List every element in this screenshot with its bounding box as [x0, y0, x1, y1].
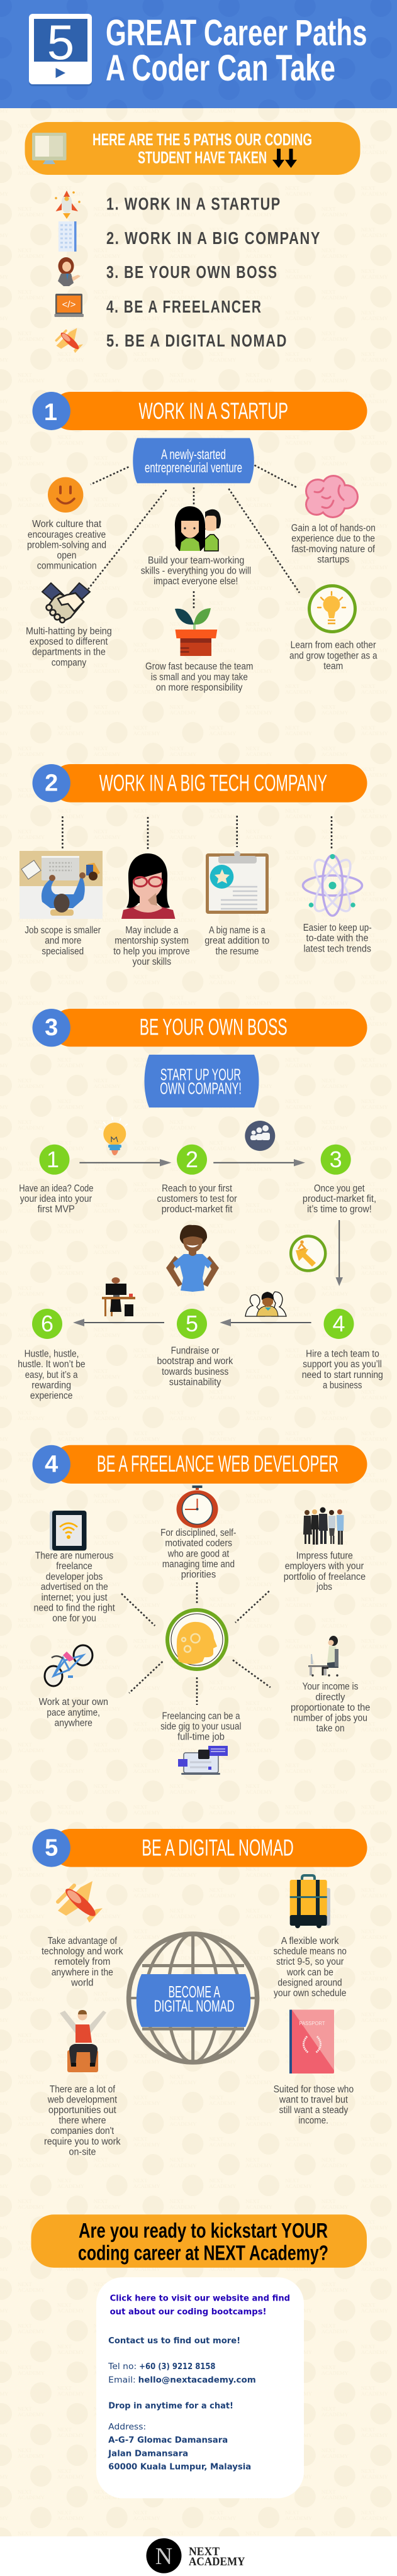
text: disciplined coders: priorities — [181, 1569, 216, 1580]
icon: desk worker — [102, 1277, 135, 1316]
text: multi-hatting: Multi-hatting by being — [26, 626, 112, 637]
panel: work in a big tech company — [20, 764, 372, 967]
text: impress employers: jobs — [316, 1582, 332, 1592]
icon: smiley — [48, 477, 83, 513]
text: disciplined coders: managing time and — [162, 1559, 235, 1570]
text: travel income: want to travel but — [279, 2094, 349, 2105]
address: Address: — [108, 2423, 146, 2432]
text: step 5 — [157, 1346, 233, 1387]
logo: next academy — [146, 2538, 245, 2573]
icon: plane — [58, 1881, 103, 1923]
panel: work in a startup — [26, 392, 377, 693]
website link: out about our coding bootcamps! — [110, 2307, 267, 2317]
illustration: woman with glasses — [121, 853, 175, 919]
heading: section 1: 1 — [44, 399, 57, 426]
step 1 — [39, 1145, 69, 1175]
icon: head with gears — [167, 1610, 226, 1669]
icon: globe with label: DIGITAL NOMAD — [154, 1996, 235, 2015]
intro text — [92, 130, 312, 167]
text: web development opportunities: web development — [47, 2094, 118, 2105]
callout: start up your own company: OWN COMPANY! — [160, 1079, 242, 1098]
dotted connectors — [62, 816, 332, 850]
text: learn together: Learn from each other — [291, 640, 376, 650]
text: remote work: technology and work — [42, 1946, 123, 1957]
text: travel income: still want a steady — [279, 2105, 349, 2116]
text: own pace: pace anytime, — [47, 1707, 100, 1718]
intro banner — [25, 122, 360, 175]
text: step 3: it’s time to grow! — [307, 1204, 372, 1215]
icon: laptop with code: </> — [62, 299, 76, 310]
icon: team outlines — [245, 1292, 286, 1316]
panel: be your own boss — [18, 1009, 383, 1401]
contact text: Tel no: — [108, 2362, 137, 2372]
heading: section 2 — [32, 764, 367, 802]
list text — [106, 194, 321, 350]
callout: newly-started venture: entrepreneurial venture — [145, 460, 242, 475]
text: step 1 — [19, 1183, 94, 1215]
text: keep up to date: to-date with the — [306, 933, 369, 944]
heading: section 4: 4 — [45, 1452, 58, 1478]
icon: video screen with number 5 — [29, 14, 92, 86]
contact text: Contact us to find out more! — [108, 2336, 240, 2346]
text: remote work — [42, 1936, 123, 1988]
text: job scope: specialised — [42, 946, 84, 957]
text: keep up to date: Easier to keep up- — [303, 923, 372, 933]
text: big name — [204, 925, 269, 957]
website link — [110, 2294, 290, 2317]
text: web development opportunities — [44, 2084, 121, 2157]
text: remote work: world — [70, 1977, 93, 1988]
text: side gig — [160, 1711, 242, 1743]
text: numerous freelance jobs: advertised on the — [41, 1582, 108, 1592]
icon: monitor — [32, 133, 67, 164]
text: impress employers: Impress future — [296, 1551, 353, 1561]
text: step 4: need to start running — [302, 1370, 383, 1380]
panel: be a digital nomad — [32, 1829, 367, 2157]
text: step 1: your idea into your — [20, 1194, 92, 1204]
text: step 3 — [303, 1183, 376, 1215]
text: multi-hatting: departments in the — [32, 647, 106, 658]
text: hands-on experience — [291, 523, 376, 565]
text: team-working skills — [141, 555, 251, 587]
text: step 2: product-market fit — [162, 1204, 233, 1215]
text: step 5: sustainability — [169, 1377, 221, 1387]
icon: woman at desk — [308, 1636, 338, 1677]
text: income: directly — [315, 1692, 345, 1703]
text: step 6: rewarding — [31, 1380, 71, 1391]
text: impress employers — [284, 1551, 366, 1592]
text: income: Your income is — [302, 1682, 359, 1692]
icon: laptop with chat bubbles — [178, 1746, 228, 1775]
text: step 4 — [302, 1349, 383, 1391]
text: work culture — [27, 519, 106, 572]
icon: tablet wifi — [50, 1511, 87, 1551]
list text: 3. BE YOUR OWN BOSS — [106, 262, 278, 282]
text: web development opportunities: on-site — [69, 2146, 96, 2157]
text: income — [291, 1682, 370, 1734]
text: own pace: Work at your own — [39, 1697, 108, 1707]
text: travel income: Suited for those who — [274, 2084, 354, 2095]
illustration: confident woman — [166, 1225, 219, 1292]
illustration: clipboard resume — [206, 851, 269, 914]
icon: brain — [305, 475, 359, 518]
text: income: take on — [316, 1723, 345, 1734]
text: flexible schedule: work can be — [286, 1967, 333, 1978]
text: flexible schedule: schedule means no — [274, 1946, 347, 1957]
contact card — [96, 2277, 304, 2498]
text: step 6: easy, but it’s a — [25, 1370, 78, 1380]
icon: idea bulb — [99, 1117, 128, 1155]
text: hands-on experience: experience due to the — [291, 533, 375, 544]
text: disciplined coders: motivated coders — [165, 1538, 232, 1549]
logo: next academy: NEXT — [189, 2545, 220, 2558]
heading: section 5 — [32, 1829, 367, 1867]
text: income: proportionate to the — [291, 1702, 370, 1713]
icon: laptop with code — [54, 294, 84, 317]
text: web development opportunities: companies don't — [50, 2126, 115, 2136]
text: mentorship: your skills — [132, 957, 171, 967]
icon: man on suitcase — [60, 2010, 106, 2072]
icon: bicycle — [45, 1645, 92, 1686]
illustration: desk from above — [20, 851, 103, 919]
logo: next academy: N — [155, 2543, 172, 2570]
text: remote work: anywhere in the — [52, 1967, 113, 1978]
text: grow fast: on more responsibility — [156, 682, 243, 693]
text: step 1: Have an idea? Code — [19, 1183, 94, 1194]
address: A-G-7 Glomac Damansara — [108, 2436, 228, 2445]
icon: growth ring — [291, 1236, 325, 1270]
text: side gig: Freelancing can be a — [162, 1711, 240, 1721]
text: multi-hatting: company — [52, 658, 86, 668]
text: big name: the resume — [215, 946, 259, 957]
text: step 6: experience — [30, 1391, 73, 1401]
text: big name: A big name is a — [209, 925, 266, 936]
contact text: +60 (3) 9212 8158 — [139, 2362, 215, 2372]
callout: newly-started venture: A newly-started — [161, 447, 226, 462]
text: numerous freelance jobs: freelance — [56, 1561, 92, 1572]
text: big name: great addition to — [204, 936, 269, 947]
list of five paths — [54, 191, 321, 353]
step 5 — [177, 1309, 207, 1339]
text: step 1: first MVP — [38, 1204, 75, 1215]
step 1: 1 — [47, 1146, 59, 1172]
text: multi-hatting: exposed to different — [30, 636, 108, 647]
text: web development opportunities: opportunities out — [48, 2105, 116, 2116]
text: learn together — [289, 640, 377, 672]
icon: stopwatch — [176, 1485, 218, 1528]
contact text: Drop in anytime for a chat! — [108, 2401, 233, 2411]
text: team-working skills: Build your team-working — [148, 555, 244, 566]
text: keep up to date: latest tech trends — [303, 943, 371, 954]
step 4: 4 — [332, 1311, 345, 1336]
text: mentorship — [113, 925, 190, 967]
dotted connectors — [88, 465, 299, 608]
heading: section 1 — [32, 392, 367, 430]
logo: next academy: ACADEMY — [189, 2555, 245, 2568]
text: job scope — [25, 925, 101, 957]
heading: section 2: 2 — [45, 770, 58, 797]
address — [108, 2423, 251, 2472]
text: impress employers: portfolio of freelance — [284, 1572, 366, 1582]
icon: globe with label: BECOME A — [169, 1982, 220, 2001]
text: own pace: anywhere — [54, 1718, 92, 1728]
text: flexible schedule: your own schedule — [274, 1988, 346, 1999]
text: numerous freelance jobs: There are numerous — [35, 1551, 113, 1561]
text: step 4: Hire a tech team to — [306, 1349, 379, 1360]
icon: handshake — [42, 583, 90, 623]
text: step 6: hustle. It won’t be — [18, 1359, 86, 1370]
text: flexible schedule — [274, 1936, 347, 1999]
list text: 1. WORK IN A STARTUP — [106, 194, 281, 214]
text: flexible schedule: designed around — [277, 1977, 342, 1988]
text: remote work: Take advantage of — [48, 1936, 118, 1946]
text: numerous freelance jobs: internet; you just — [42, 1592, 108, 1603]
text: numerous freelance jobs: developer jobs — [46, 1572, 103, 1582]
address: Jalan Damansara — [108, 2450, 188, 2459]
text: income: number of jobs you — [293, 1713, 367, 1723]
dotted connectors — [121, 1582, 271, 1705]
text: disciplined coders: For disciplined, self- — [160, 1528, 236, 1538]
icon: team people — [175, 506, 221, 551]
text: grow fast — [145, 662, 253, 693]
heading: section 3: 3 — [45, 1014, 58, 1041]
icon: globe with label — [129, 1934, 257, 2062]
icon: customers group — [245, 1121, 275, 1151]
text: work culture: open — [57, 550, 77, 561]
text: hands-on experience: fast-moving nature of — [291, 544, 376, 555]
text: disciplined coders — [160, 1528, 236, 1580]
illustration: atom — [303, 854, 362, 916]
text: grow fast: is small and you may take — [151, 672, 248, 682]
text: travel income — [274, 2084, 354, 2126]
text: mentorship: to help you improve — [113, 946, 190, 957]
text: numerous freelance jobs: need to find the right — [34, 1602, 115, 1614]
text: step 5: Fundraise or — [171, 1346, 219, 1357]
text: step 2: Reach to your first — [162, 1183, 233, 1194]
text: hands-on experience: startups — [317, 554, 349, 565]
text: job scope: and more — [45, 936, 82, 947]
text: web development opportunities: require you to work — [44, 2136, 121, 2147]
address: 60000 Kuala Lumpur, Malaysia — [108, 2463, 251, 2472]
icon: businesswoman — [58, 257, 81, 286]
text: mentorship: May include a — [125, 925, 179, 936]
icon: business people — [303, 1507, 344, 1545]
icon: down arrows — [272, 148, 297, 168]
icon: small plane — [56, 328, 83, 353]
title — [106, 13, 367, 89]
list text: 4. BE A FREELANCER — [106, 297, 262, 316]
icon: luggage — [290, 1875, 330, 1928]
text: web development opportunities: there where — [59, 2116, 106, 2126]
heading: section 5: BE A DIGITAL NOMAD — [142, 1835, 294, 1860]
text: job scope: Job scope is smaller — [25, 925, 101, 936]
text: grow fast: Grow fast because the team — [145, 662, 253, 672]
step 4 — [323, 1309, 354, 1339]
icon: video screen with number 5: 5 — [47, 14, 74, 70]
callout: start up your own company — [145, 1055, 259, 1108]
panel: be a freelance web developer — [32, 1445, 370, 1775]
heading: section 1: WORK IN A STARTUP — [138, 398, 288, 424]
heading: section 3: BE YOUR OWN BOSS — [140, 1014, 288, 1040]
icon: light bulb ring — [310, 586, 355, 631]
text: learn together: team — [323, 661, 343, 672]
list text: 2. WORK IN A BIG COMPANY — [106, 228, 321, 248]
text: side gig: full-time job — [177, 1732, 225, 1743]
heading: section 3 — [32, 1009, 367, 1046]
text: work culture: communication — [37, 561, 97, 572]
icon: passport: PASSPORT — [299, 2020, 325, 2026]
text: team-working skills: impact everyone else! — [154, 576, 238, 587]
text: remote work: remotely from — [54, 1957, 110, 1967]
icon: rocket — [55, 191, 81, 219]
text: step 3: product-market fit, — [303, 1194, 376, 1204]
website link: Click here to visit our website and find — [110, 2294, 290, 2303]
callout: start up your own company: START UP YOUR — [160, 1065, 241, 1084]
text: multi-hatting — [26, 626, 112, 668]
contact text — [108, 2336, 256, 2411]
text: step 6 — [18, 1349, 86, 1401]
callout: newly-started venture — [133, 438, 254, 483]
text: work culture: encourages creative — [28, 530, 106, 540]
step 3 — [321, 1145, 351, 1175]
icon: potted plant — [175, 608, 217, 656]
text: numerous freelance jobs — [34, 1551, 115, 1624]
step 2 — [177, 1145, 207, 1175]
text: flexible schedule: strict 9-5, so your — [276, 1957, 344, 1967]
text: numerous freelance jobs: one for you — [52, 1613, 96, 1624]
call to action banner: Are you ready to kickstart YOUR — [79, 2219, 328, 2243]
step 3: 3 — [330, 1146, 342, 1172]
contact text: hello@nextacademy.com — [138, 2376, 256, 2385]
step 6: 6 — [41, 1311, 53, 1336]
icon: passport — [289, 2010, 334, 2074]
call to action banner — [31, 2214, 367, 2268]
heading: section 5: 5 — [45, 1835, 58, 1861]
text: step 3: Once you get — [314, 1183, 365, 1194]
text: mentorship: mentorship system — [115, 936, 189, 947]
text: team-working skills: skills - everything you do will — [141, 565, 251, 576]
text: flexible schedule: A flexible work — [281, 1936, 339, 1946]
text: learn together: and grow together as a — [289, 650, 377, 661]
text: step 2: customers to test for — [157, 1194, 237, 1204]
step 6 — [32, 1309, 62, 1339]
text: step 5: towards business — [162, 1367, 229, 1377]
text: work culture: Work culture that — [32, 519, 102, 530]
text: work culture: problem-solving and — [27, 540, 106, 550]
text: keep up to date — [303, 923, 372, 954]
step 2: 2 — [186, 1146, 198, 1172]
arrows between steps — [73, 1159, 343, 1326]
header banner — [0, 0, 397, 108]
text: hands-on experience: Gain a lot of hands-on — [291, 523, 376, 533]
text: step 4: a business — [323, 1380, 362, 1391]
process step circles — [32, 1145, 354, 1339]
text: step 2 — [157, 1183, 237, 1215]
step 5: 5 — [186, 1311, 198, 1336]
text: step 4: support you as you’ll — [303, 1359, 382, 1370]
intro text: STUDENT HAVE TAKEN — [138, 148, 267, 167]
text: travel income: income. — [298, 2116, 328, 2126]
list text: 5. BE A DIGITAL NOMAD — [106, 331, 288, 350]
text: step 5: bootstrap and work — [157, 1356, 233, 1367]
icon: office building — [59, 221, 77, 252]
heading: section 4 — [32, 1445, 367, 1484]
text: own pace — [39, 1697, 108, 1728]
footer logo band — [0, 2536, 397, 2576]
text: disciplined coders: who are good at — [167, 1548, 230, 1559]
text: impress employers: employers with your — [285, 1561, 364, 1572]
text: step 6: Hustle, hustle, — [25, 1349, 79, 1360]
text: side gig: side gig to your usual — [160, 1721, 242, 1732]
contact text: Email: — [108, 2376, 136, 2385]
text: web development opportunities: There are a lot of — [50, 2084, 116, 2095]
